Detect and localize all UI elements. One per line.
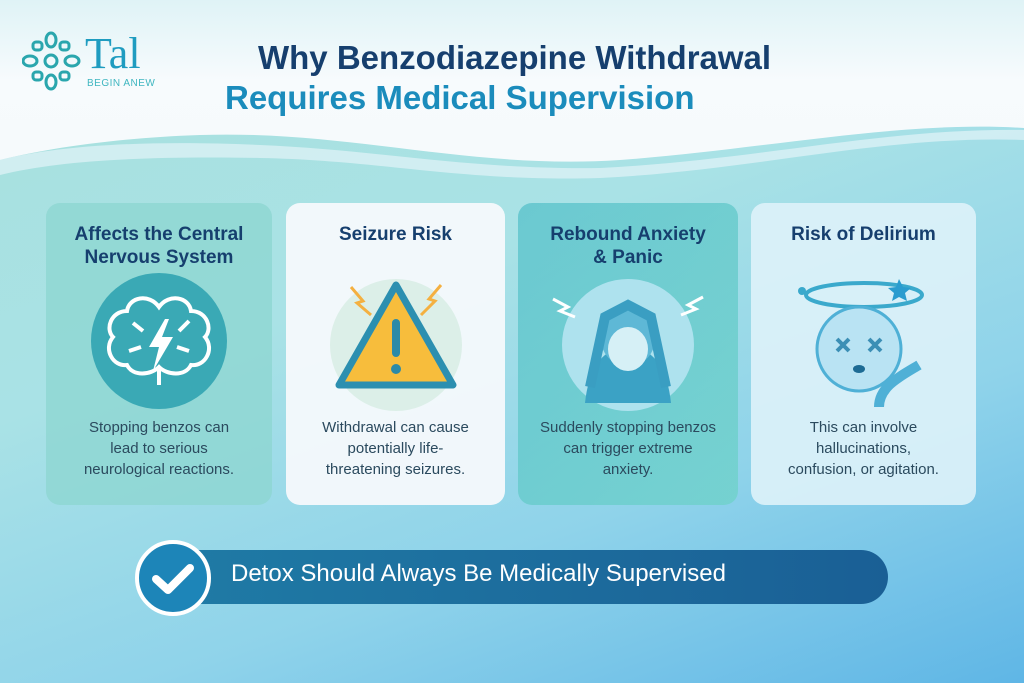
logo: Tal <box>85 29 141 78</box>
title <box>225 39 771 116</box>
panel: rebound anxiety: Suddenly stopping benzos <box>540 419 716 436</box>
panel: central nervous system <box>46 203 272 505</box>
icon: dizzy face <box>798 279 924 407</box>
title: Why Benzodiazepine Withdrawal <box>258 39 771 76</box>
logo <box>22 29 155 90</box>
panel: delirium: Risk of Delirium <box>791 224 936 245</box>
panel: rebound anxiety <box>518 203 738 505</box>
icon: check circle <box>135 540 211 616</box>
icon: flower <box>22 32 80 90</box>
banner: detox supervised: Detox Should Always Be Medically Supervised <box>231 560 726 587</box>
panel: rebound anxiety: Rebound Anxiety <box>550 224 706 245</box>
panel: delirium <box>751 203 976 505</box>
icon: brain <box>91 273 227 409</box>
panel: central nervous system: Affects the Central <box>75 224 243 245</box>
panel: central nervous system: neurological reactions. <box>84 461 234 478</box>
panel: seizure risk: Seizure Risk <box>339 224 452 245</box>
panel: seizure risk: Withdrawal can cause <box>322 419 469 436</box>
icon: warning triangle <box>330 279 462 411</box>
panel: seizure risk <box>286 203 505 505</box>
panel: rebound anxiety: anxiety. <box>603 461 653 478</box>
banner: detox supervised <box>135 540 888 616</box>
panel: rebound anxiety: can trigger extreme <box>563 440 693 457</box>
logo: BEGIN ANEW <box>87 78 155 89</box>
panel: central nervous system: Stopping benzos can <box>89 419 229 436</box>
panel: delirium: hallucinations, <box>816 440 911 457</box>
panel: seizure risk: threatening seizures. <box>326 461 465 478</box>
panel: delirium: This can involve <box>810 419 917 436</box>
panel: central nervous system: lead to serious <box>110 440 208 457</box>
icon: anxious person <box>552 279 704 411</box>
title: Requires Medical Supervision <box>225 79 694 116</box>
panel: central nervous system: Nervous System <box>85 247 233 268</box>
panel: rebound anxiety: & Panic <box>593 247 663 268</box>
panel: seizure risk: potentially life- <box>348 440 443 457</box>
panel: delirium: confusion, or agitation. <box>788 461 939 478</box>
